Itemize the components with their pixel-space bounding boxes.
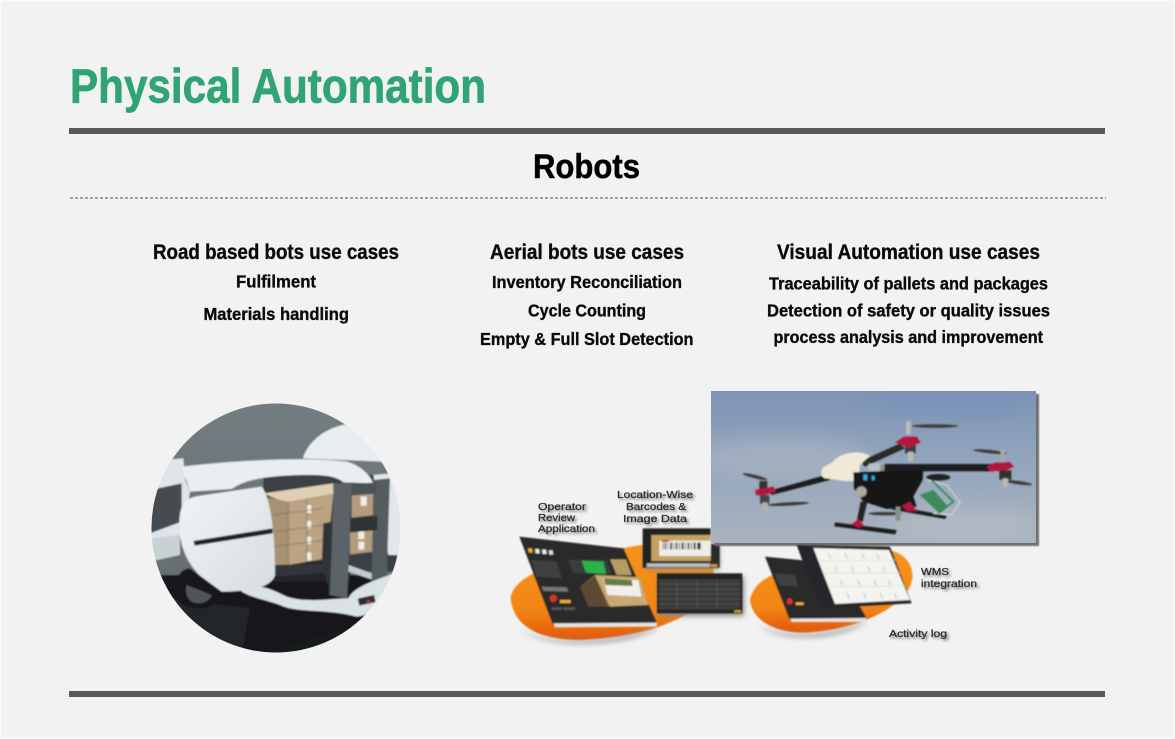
title: Physical Automation <box>70 60 486 114</box>
label: location-wise barcodes and image data: Barcodes & <box>626 501 686 513</box>
orange ellipse <box>511 542 713 640</box>
heading: aerial bots: Aerial bots use cases <box>490 241 684 264</box>
item: empty and full slot detection: Empty & Full Slot Detection <box>480 329 694 349</box>
illustration: WMS integration screens <box>750 545 912 637</box>
text block: aerial bots use cases <box>480 241 694 349</box>
label: WMS integration: integration <box>921 578 977 590</box>
label: location-wise barcodes and image data: Location-Wise <box>617 489 693 501</box>
item: traceability: Traceability of pallets and packages <box>769 274 1048 294</box>
text block: visual automation use cases <box>767 241 1050 347</box>
item: inventory reconciliation: Inventory Reconciliation <box>492 272 682 292</box>
item: materials handling: Materials handling <box>204 304 349 324</box>
illustration: operator review application <box>511 528 744 644</box>
label: activity log: Activity log <box>889 628 947 640</box>
illustration: autonomous delivery vehicle in circle <box>152 404 400 652</box>
laptop <box>519 537 657 627</box>
data table window <box>657 573 744 616</box>
heading: Robots: Robots <box>533 148 640 186</box>
label: location-wise barcodes and image data: Image Data <box>623 513 687 525</box>
item: cycle counting: Cycle Counting <box>528 300 646 320</box>
item: process analysis: process analysis and improvement <box>774 327 1043 347</box>
barcode window <box>643 528 720 569</box>
label: operator review application <box>538 501 595 535</box>
label: WMS integration <box>921 566 977 590</box>
item: fulfilment: Fulfilment <box>236 272 316 292</box>
label: location-wise barcodes and image data <box>617 489 693 525</box>
label: WMS integration: WMS <box>921 566 949 578</box>
photo: drone in the sky <box>697 391 1043 546</box>
text block: road based bots use cases <box>153 241 399 324</box>
heading: visual automation: Visual Automation use cases <box>777 241 1040 264</box>
label: operator review application: Application <box>538 523 595 535</box>
heading: road based bots: Road based bots use cases <box>153 241 399 264</box>
label: operator review application: Review <box>538 512 575 524</box>
label: operator review application: Operator <box>538 501 587 513</box>
item: detection of issues: Detection of safety or quality issues <box>767 300 1050 320</box>
